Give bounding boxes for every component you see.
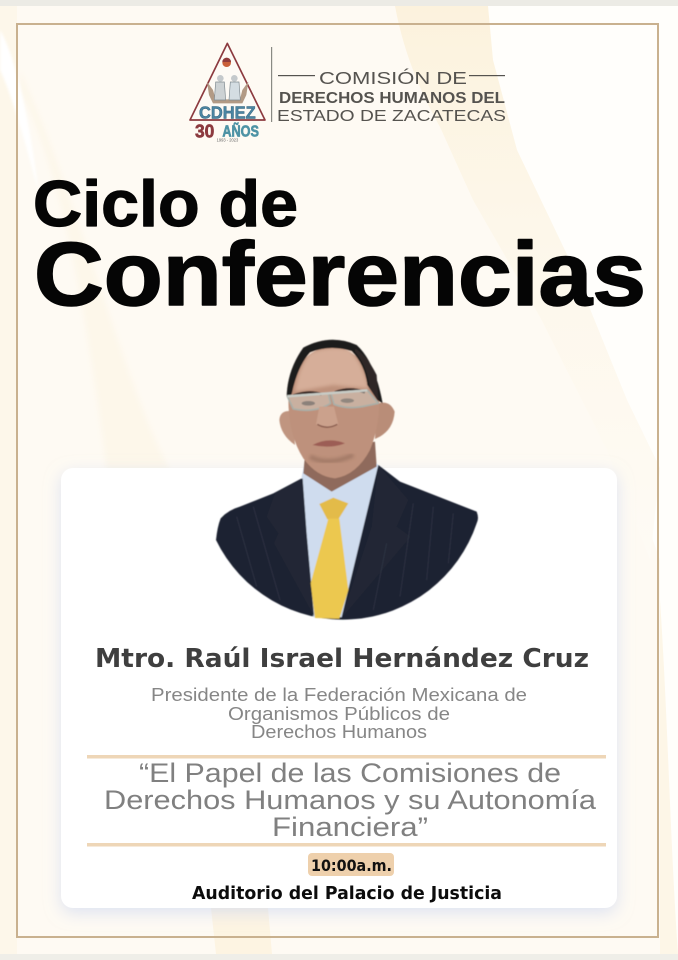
speaker role: Presidente de la Federación Mexicana de: [151, 685, 527, 705]
divider bottom: [87, 843, 606, 846]
organization name: COMISIÓN DE: [319, 67, 467, 88]
time badge: 10:00a.m.: [311, 856, 392, 875]
speaker role: Derechos Humanos: [251, 722, 427, 742]
head: [279, 340, 395, 492]
logo CDHEZ wordmark: CDHEZ: [199, 102, 256, 122]
venue: Auditorio del Palacio de Justicia: [192, 884, 502, 904]
logo emblem: [207, 58, 248, 103]
logo: CDHEZ 30 años: [190, 43, 265, 143]
logo divider: [271, 47, 272, 122]
panel: speaker card: [61, 340, 617, 908]
title: Conferencias: [34, 225, 646, 325]
logo triangle: [190, 43, 265, 120]
organization name: [277, 67, 506, 125]
speaker role: Organismos Públicos de: [228, 704, 450, 724]
logo AÑOS: AÑOS: [222, 123, 259, 141]
conference topic: Financiera”: [272, 812, 428, 842]
divider top: [87, 755, 606, 758]
title: [33, 167, 646, 325]
speaker portrait: [216, 340, 478, 620]
title: Ciclo de: [33, 167, 298, 240]
speaker role: [151, 685, 527, 742]
conference topic: “El Papel de las Comisiones de: [139, 758, 561, 788]
logo years: 1993 - 2023: [217, 138, 239, 143]
organization name: ESTADO DE ZACATECAS: [277, 108, 506, 125]
speaker name: Mtro. Raúl Israel Hernández Cruz: [95, 644, 589, 674]
logo 30: 30: [195, 120, 214, 141]
conference topic: Derechos Humanos y su Autonomía: [104, 785, 597, 815]
conference topic: [104, 758, 597, 842]
organization name: DERECHOS HUMANOS DEL: [279, 90, 505, 107]
suit and shirt: [216, 453, 478, 620]
